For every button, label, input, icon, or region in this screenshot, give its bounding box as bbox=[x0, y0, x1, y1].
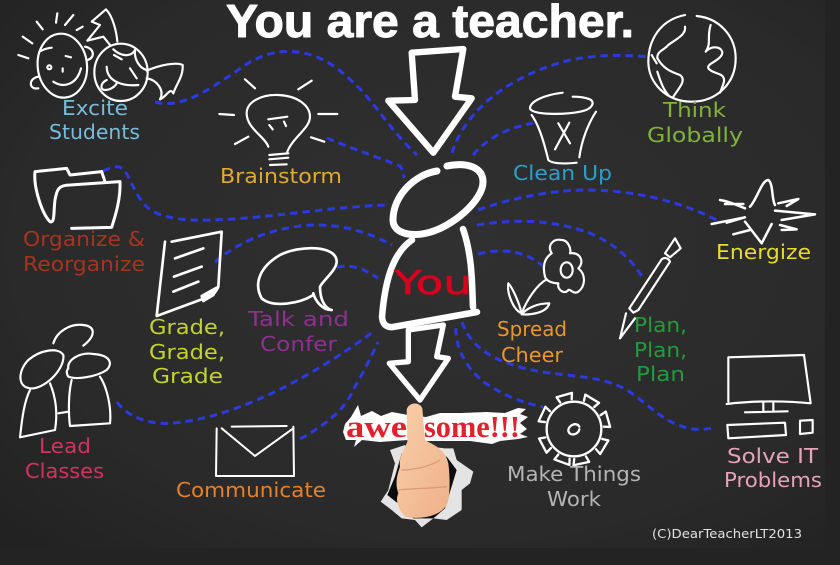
icon: group of people bbox=[20, 325, 110, 437]
label: Plan, Plan, Plan: Plan bbox=[636, 362, 685, 386]
dashed connectors bbox=[103, 51, 720, 439]
icon: pen bbox=[620, 238, 681, 338]
label: Lead Classes bbox=[25, 434, 104, 483]
icon: energy star bbox=[712, 180, 815, 243]
label: Talk and Confer bbox=[247, 307, 349, 356]
label: Think Globally: Think bbox=[662, 98, 726, 122]
label: Grade, Grade, Grade: Grade, bbox=[149, 340, 225, 364]
label: Clean Up: Clean Up bbox=[513, 161, 612, 185]
label: Plan, Plan, Plan: Plan, bbox=[634, 313, 687, 337]
label: Excite Students: Excite bbox=[62, 96, 128, 120]
label: Make Things Work bbox=[507, 462, 641, 511]
icon: arrow to awesome bbox=[389, 325, 448, 400]
label: You: You bbox=[393, 263, 472, 302]
label: Solve IT Problems: Solve IT bbox=[727, 444, 819, 468]
label: Organize & Reorganize bbox=[23, 227, 145, 276]
label: Make Things Work: Work bbox=[547, 487, 601, 511]
label: Energize: Energize bbox=[716, 240, 811, 264]
label: Excite Students bbox=[49, 96, 140, 144]
icon: thumbs up through torn paper bbox=[381, 404, 473, 527]
label: Spread Cheer bbox=[497, 317, 567, 367]
figure: You bbox=[382, 165, 483, 327]
icon: speech bubble bbox=[258, 248, 337, 310]
label: Lead Classes: Lead bbox=[39, 434, 91, 458]
icon: large arrow into You bbox=[388, 49, 472, 153]
label: Grade, Grade, Grade bbox=[149, 315, 225, 388]
label: Organize & Reorganize: Organize & bbox=[23, 227, 145, 251]
label: Grade, Grade, Grade: Grade, bbox=[149, 315, 225, 339]
icon: two students bbox=[18, 9, 183, 101]
icon: envelope bbox=[216, 426, 294, 476]
label: Plan, Plan, Plan: Plan, bbox=[634, 338, 687, 362]
icon: folder bbox=[35, 168, 120, 228]
icon: gear bbox=[539, 393, 610, 465]
label: Spread Cheer: Spread bbox=[497, 317, 567, 341]
label: Solve IT Problems bbox=[724, 444, 822, 492]
label: Grade, Grade, Grade: Grade bbox=[152, 364, 223, 388]
icon: desktop computer bbox=[727, 355, 813, 438]
icon: waste bin bbox=[530, 93, 596, 163]
label: Organize & Reorganize: Reorganize bbox=[23, 252, 145, 276]
label: Plan, Plan, Plan bbox=[634, 313, 687, 386]
icon: graded paper bbox=[157, 232, 222, 316]
icon: globe bbox=[648, 15, 736, 102]
label: Brainstorm: Brainstorm bbox=[220, 164, 342, 188]
label: Spread Cheer: Cheer bbox=[501, 343, 564, 367]
awesome badge: awe bbox=[346, 409, 407, 444]
icon: light bulb bbox=[219, 79, 337, 165]
label: Lead Classes: Classes bbox=[25, 459, 104, 483]
awesome badge: some!!! bbox=[424, 409, 520, 444]
awesome badge bbox=[343, 405, 528, 447]
icon: flower bbox=[508, 240, 584, 314]
copyright credit: (C)DearTeacherLT2013 bbox=[652, 526, 802, 541]
label: Excite Students: Students bbox=[49, 120, 140, 144]
label: Talk and Confer: Confer bbox=[260, 332, 338, 356]
label: Make Things Work: Make Things bbox=[507, 462, 641, 486]
label: Think Globally bbox=[647, 98, 743, 147]
label: Communicate: Communicate bbox=[176, 478, 326, 502]
label: Talk and Confer: Talk and bbox=[247, 307, 349, 331]
label: Think Globally: Globally bbox=[647, 123, 743, 147]
label: Solve IT Problems: Problems bbox=[724, 468, 822, 492]
